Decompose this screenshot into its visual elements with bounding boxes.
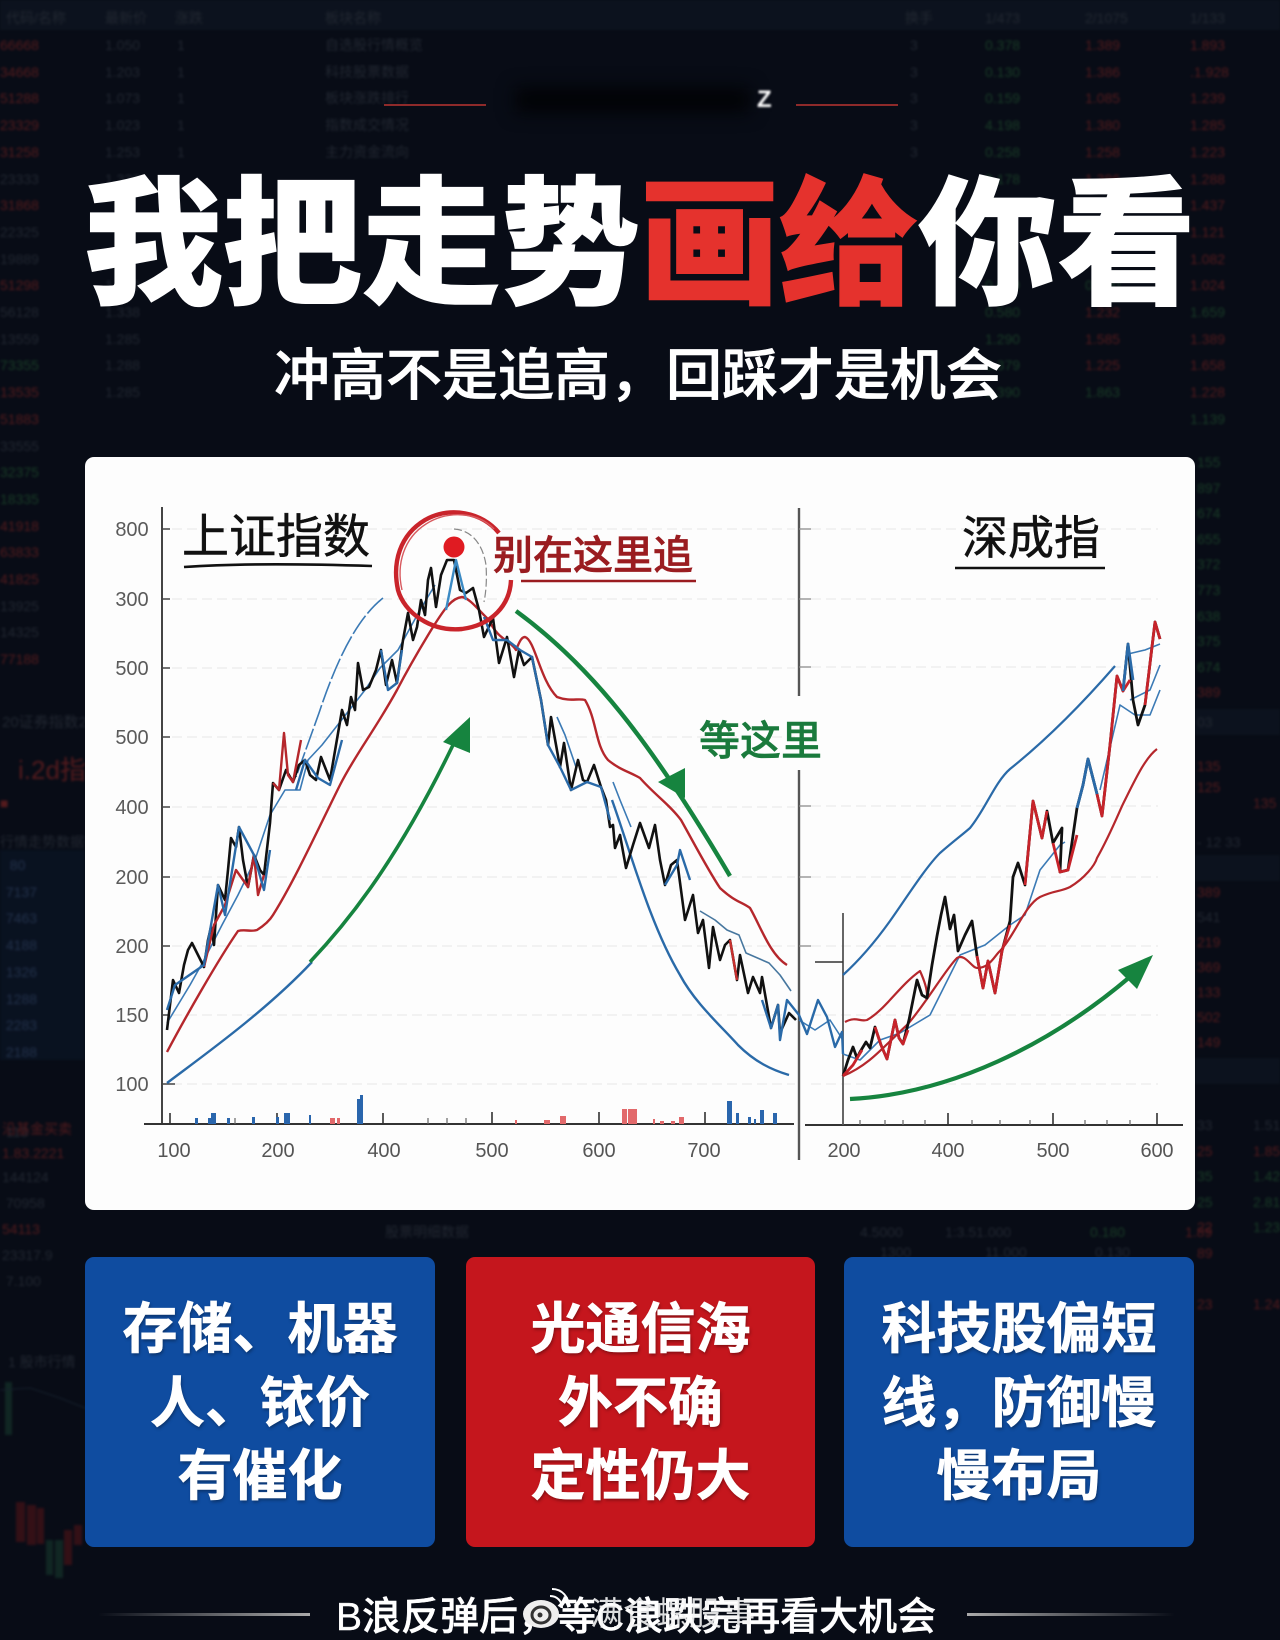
top label: hidden subtitle: Z xyxy=(757,86,772,113)
background: market data table: - 12 33 xyxy=(1197,834,1241,850)
x axis labels: 200 xyxy=(261,1140,295,1162)
arrow: rising right xyxy=(850,955,1153,1099)
centre divider xyxy=(799,508,811,1160)
background: market data table: 1.050 1.203 1.073 1.023 1.253 1.333 1.280 1.338 1.285 1.288 1.285 xyxy=(105,37,140,400)
background: market data table: 代码/名称 xyxy=(6,10,66,26)
panel: blue box left: 人、铱价 xyxy=(150,1372,370,1434)
background: market data table: 135 125 xyxy=(1197,758,1220,795)
background: market data table: 0.378 0.130 0.159 4.198 0.258 0.178 0.689 0.580 1.290 0.379 0.390 xyxy=(985,37,1020,400)
icon: red peak dot xyxy=(444,536,464,558)
x axis labels: 200 xyxy=(828,1140,860,1162)
panel: red box centre: 光通信海 xyxy=(530,1298,750,1360)
background: market data table: 0.180 xyxy=(1090,1224,1125,1240)
panel: blue box right xyxy=(844,1257,1194,1547)
background: market data table: 1/473 xyxy=(985,10,1020,26)
background: market data table: 0.130 xyxy=(1095,1244,1130,1260)
x axis xyxy=(144,1112,1183,1125)
background: market data table: 3 3 3 3 3 xyxy=(910,37,918,160)
y axis labels: 200 xyxy=(115,867,149,889)
chart: left price line xyxy=(167,560,796,1033)
footer line right xyxy=(967,1613,1175,1616)
panel: blue box left: 有催化 xyxy=(177,1445,342,1507)
background: market data table: 1 股市行情 xyxy=(8,1354,76,1370)
y axis labels: 500 xyxy=(115,658,149,680)
heading: Shanghai index: 上证指数 xyxy=(182,510,370,563)
y axis labels: 150 xyxy=(115,1005,149,1027)
panel: chart card xyxy=(85,457,1195,1210)
footer text: B浪反弹后，等C浪跌完再看大机会 xyxy=(336,1596,936,1639)
background: market data table: 80 7137 7463 4188 1326 1288 2283 2188 113 xyxy=(2,857,37,1140)
panel: blue box right: 慢布局 xyxy=(936,1445,1102,1507)
background: market data table: ■ xyxy=(0,795,8,811)
background: market data table: 66668 34668 51288 23329 31258 23333 31868 22325 19889 51298 56128 13559 73355 13535 51883 33555 32375 18335 41918 63833 41825 13925 14325 77188 xyxy=(0,37,39,667)
grid lines xyxy=(172,529,1158,1084)
background: market data table: 1.389 1.386 1.085 1.380 1.258 1.386 0.180 1.232 1.585 1.225 1.863 xyxy=(1085,37,1120,400)
background: market data table: 4.5000 xyxy=(860,1224,903,1240)
background: market data table: 股票明细数据 xyxy=(385,1224,469,1240)
background: market data table: 换手 xyxy=(905,10,933,26)
y axis labels: 300 xyxy=(115,589,149,611)
background: market data table: 20证券指数2 xyxy=(2,714,87,731)
x axis labels: 400 xyxy=(367,1140,401,1162)
background: market data table: 33 25 35 25 22 89 23 xyxy=(1197,1117,1213,1312)
background: market data table: 144124 70958 54113 23317.9 7.100 xyxy=(2,1169,53,1289)
panel: red box centre: 定性仍大 xyxy=(530,1445,750,1507)
background: market data table: 1300 xyxy=(880,1244,911,1260)
x axis labels: 500 xyxy=(475,1140,509,1162)
annotation: wait here: 等这里 xyxy=(699,718,822,764)
panel: blue box left xyxy=(85,1257,435,1547)
chart: left lower blue curve xyxy=(167,800,789,1083)
background: market data table: 2/1075 xyxy=(1085,10,1128,26)
top line right xyxy=(796,104,898,106)
background: market data table: 389 541 219 369 133 502 149 xyxy=(1197,884,1220,1050)
background: market data table: 1/133 xyxy=(1190,10,1225,26)
footer line left xyxy=(98,1613,310,1616)
top line left xyxy=(384,104,486,106)
background: market data table: 1.893 .1.928 1.239 1.285 1.223 1.288 1.437 1.121 1.082 1.024 1.659 1.389 1.658 1.228 1.139 xyxy=(1190,37,1229,427)
right axis line xyxy=(815,913,843,1125)
chart: right lines xyxy=(843,644,1160,1076)
background: market data table: i.2d指数 xyxy=(18,755,112,785)
panel: blue box right: 线，防御慢 xyxy=(881,1372,1156,1434)
x axis labels: 600 xyxy=(1140,1140,1174,1162)
title: 我把走势画给你看 xyxy=(84,168,1196,323)
chart: left thin blue lines xyxy=(167,585,843,1040)
background: market data table: 11.000 xyxy=(985,1244,1027,1260)
background: market data table: 自选股行情概览 科技股票数据 板块涨跌排行 指数成交情况 主力资金流向 xyxy=(325,37,423,160)
background: market data table: 涨跌 xyxy=(175,10,203,26)
y axis labels: 800 xyxy=(115,519,149,541)
panel: red box centre xyxy=(466,1257,815,1547)
arrow: rising left xyxy=(310,717,470,962)
watermark xyxy=(523,1588,755,1632)
heading: Shenzhen index: 深成指 xyxy=(962,512,1100,564)
annotation: do not chase here: 别在这里追 xyxy=(493,534,693,578)
background: market data table: 1.51 1.85 1.42 2.81 1.23 1.24 xyxy=(1253,1117,1280,1312)
arrow: falling xyxy=(516,611,730,876)
x axis labels: 700 xyxy=(687,1140,721,1162)
background: market data table: 03 xyxy=(1197,714,1213,730)
chart: right price highlights xyxy=(843,622,1160,1076)
x axis labels: 400 xyxy=(932,1140,964,1162)
panel: blue box left: 存储、机器 xyxy=(122,1298,398,1360)
background: market data table: 行情走势数据行情 xyxy=(0,834,112,850)
background: market data table: 最新价 xyxy=(105,10,147,26)
background: small candles xyxy=(4,1382,83,1578)
background: market data table: 1:3.51.000 xyxy=(945,1224,1011,1240)
top label: hidden subtitle xyxy=(516,86,773,113)
x axis labels: 600 xyxy=(582,1140,616,1162)
background: market data table: 1.89 xyxy=(1185,1224,1212,1240)
y axis labels xyxy=(115,519,149,1096)
left y axis xyxy=(162,507,175,1124)
x axis labels: 100 xyxy=(157,1140,191,1162)
subtitle: 冲高不是追高，回踩才是机会 xyxy=(274,344,1002,407)
y axis labels: 200 xyxy=(115,936,149,958)
x axis labels xyxy=(157,1140,1174,1162)
background: market data table: 1 1 1 1 1 xyxy=(177,37,185,160)
x axis labels: 500 xyxy=(1036,1140,1070,1162)
background: market data table: 135 xyxy=(1253,795,1276,811)
panel: blue box right: 科技股偏短 xyxy=(881,1298,1156,1360)
callout: peak circle xyxy=(396,512,511,629)
panel: red box centre: 外不确 xyxy=(558,1372,723,1434)
watermark: 满食螺股事 xyxy=(590,1595,755,1632)
background: market data table: 沿基金买卖 1.83.2221 xyxy=(2,1121,72,1161)
y axis labels: 400 xyxy=(115,797,149,819)
y axis labels: 100 xyxy=(115,1074,149,1096)
chart: left red moving average xyxy=(167,597,787,1052)
background: market data table: 板块名称 xyxy=(325,10,381,26)
background: market data table: 155 897 674 655 372 773 638 375 674 389 xyxy=(1197,454,1220,700)
y axis labels: 500 xyxy=(115,727,149,749)
chart: right price line xyxy=(843,622,1160,1076)
chart: price highlights xyxy=(167,560,843,1054)
volume bars xyxy=(195,1095,777,1124)
